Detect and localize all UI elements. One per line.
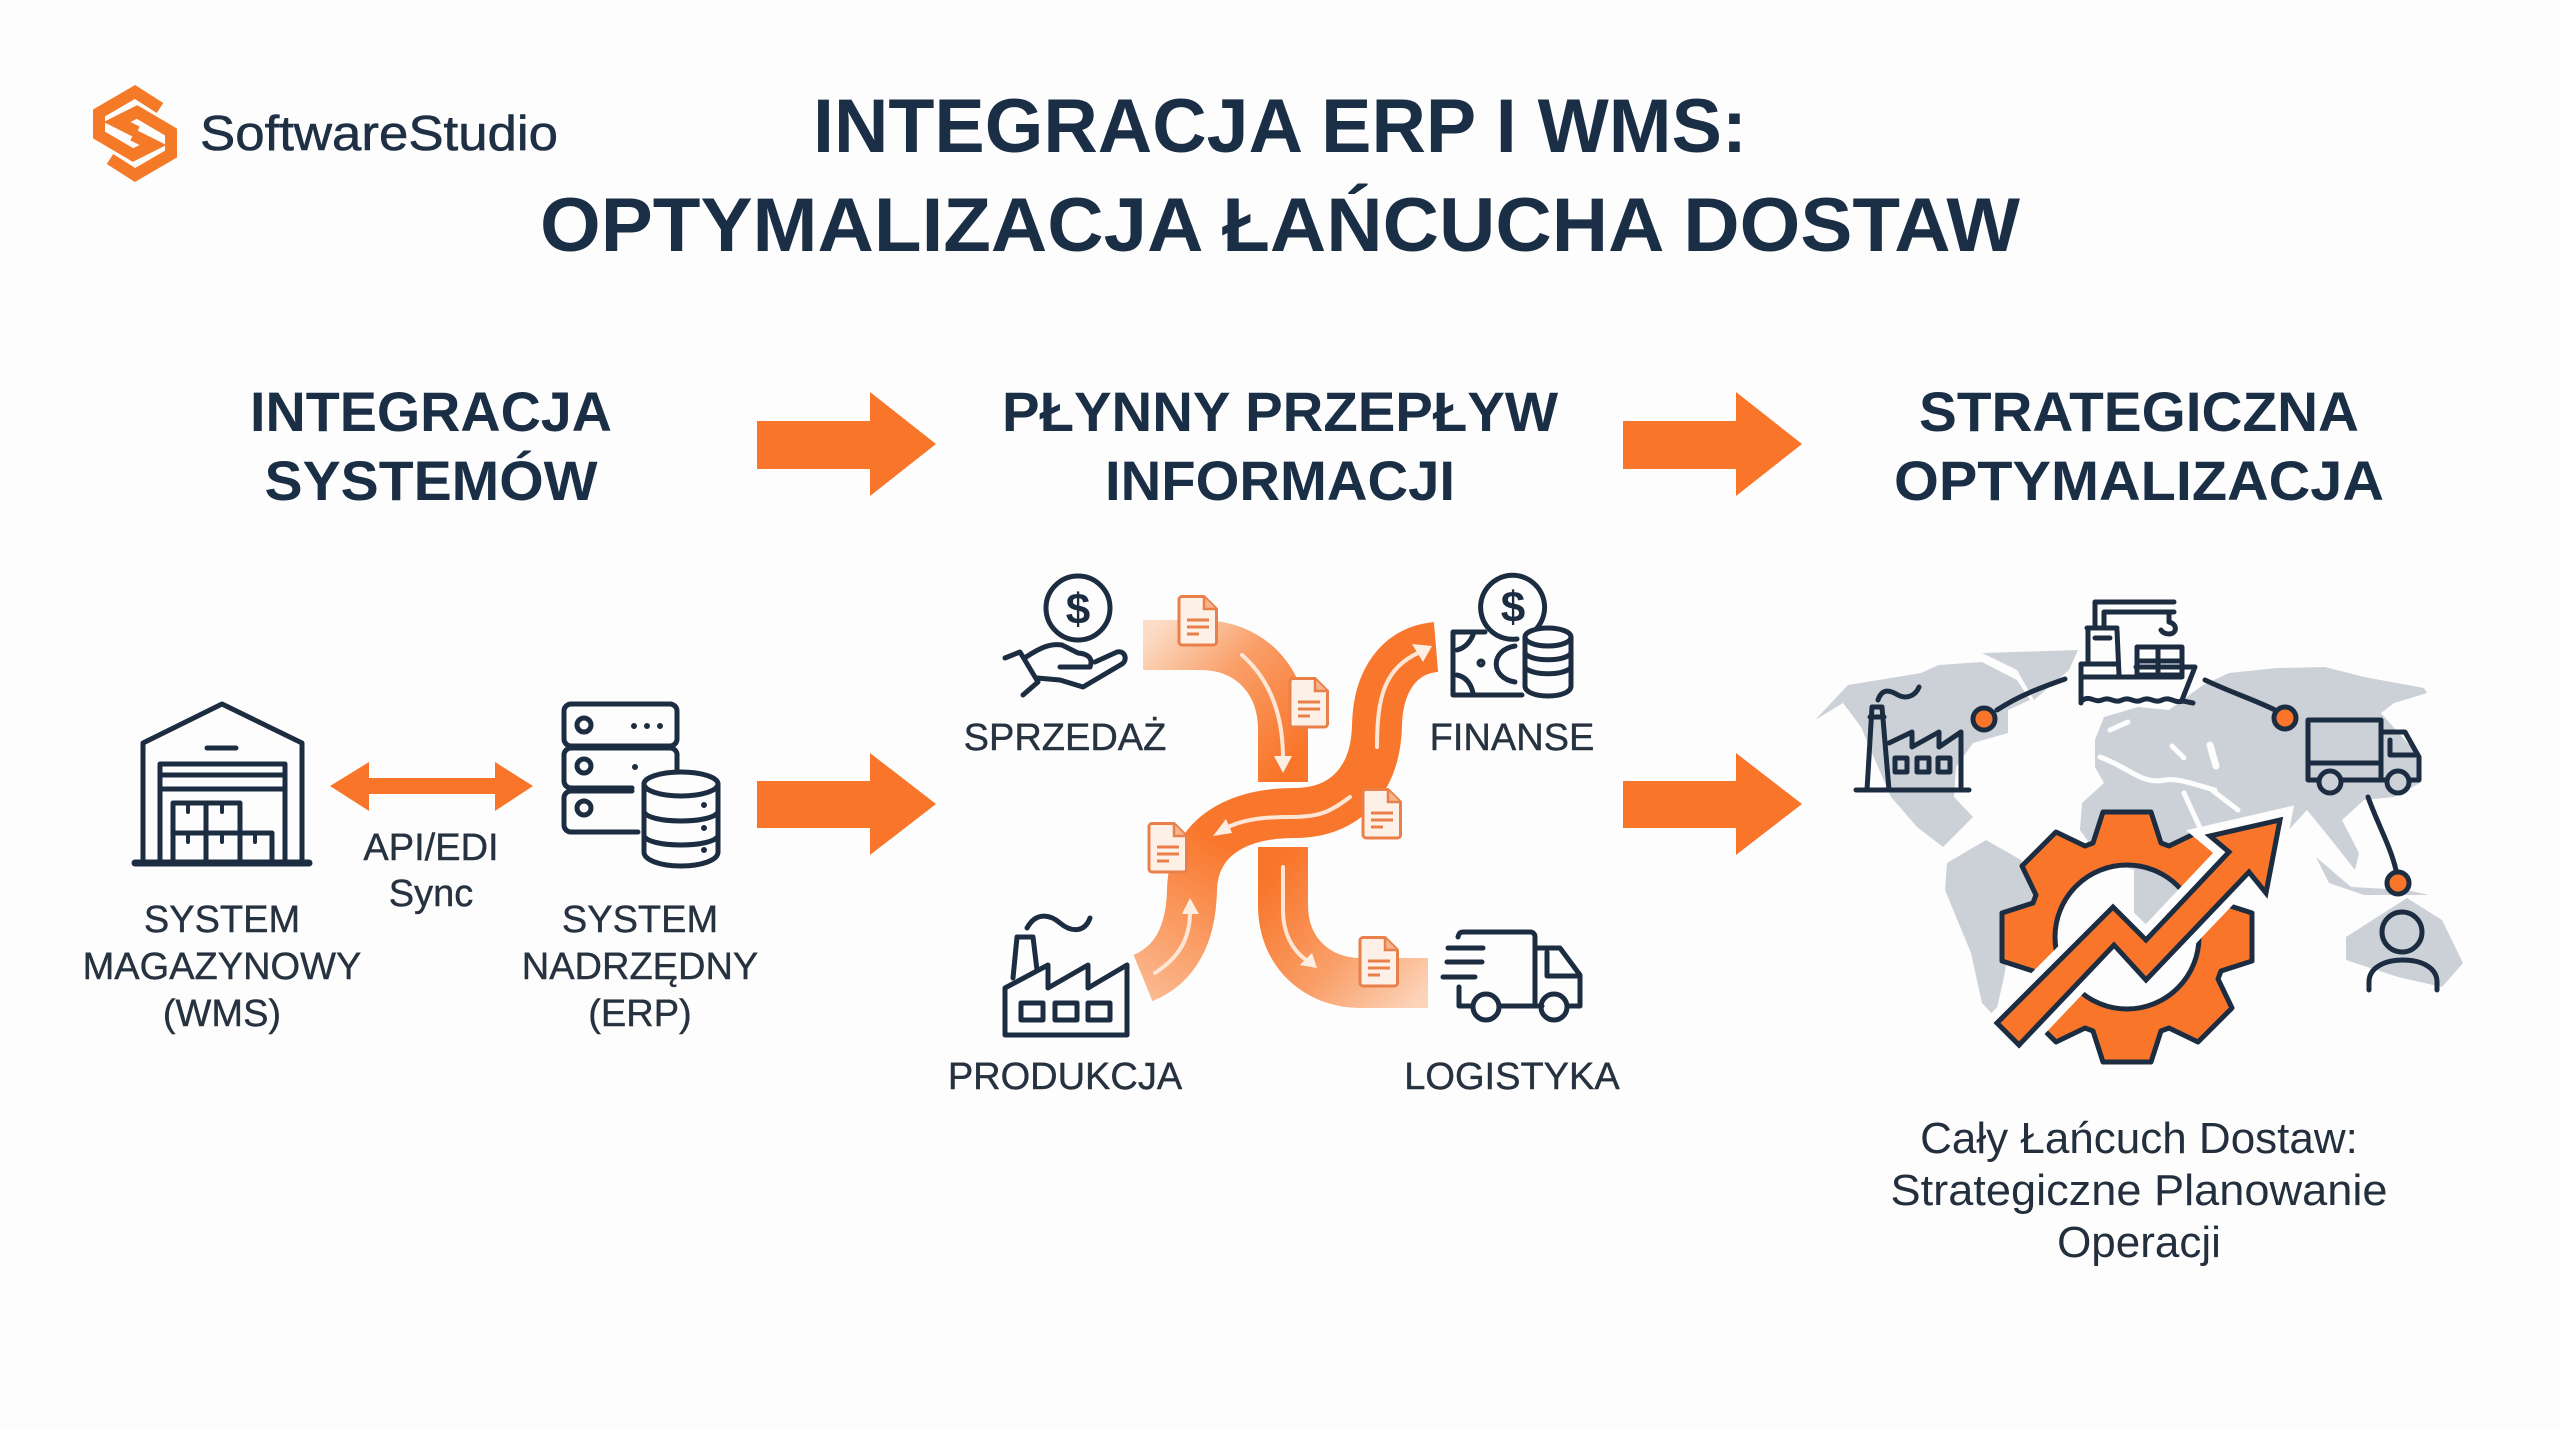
heading: strategiczna optymalizacja: OPTYMALIZACJA [1894,449,2384,512]
label: system magazynowy: MAGAZYNOWY [83,946,361,988]
arrow: up from produkcja [1155,898,1199,973]
logo: SoftwareStudio [99,92,558,175]
flow arrows [1155,644,1432,973]
connector: factory to ship [1973,679,2065,730]
flow diagram: ribbons [1143,645,1436,983]
growth arrow halo [1997,820,2280,1045]
southeast asia islands [2316,857,2429,895]
icon: document 1 [1179,596,1216,645]
label: system nadrzędny: NADRZĘDNY [522,946,758,988]
icon: document 4 [1149,824,1186,872]
connector: truck to customer [2368,797,2409,894]
caption: supply chain [1890,1114,2388,1267]
icon: logistics truck [1443,932,1580,1020]
icon: container ship with crane [2081,602,2195,703]
eurasia and africa [2080,667,2427,943]
caption: supply chain: Operacji [2057,1218,2221,1267]
title: OPTYMALIZACJA ŁAŃCUCHA DOSTAW [540,183,2020,268]
ribbon: sprzedaż [1143,645,1283,782]
label: API/EDI Sync: Sync [389,873,473,915]
icon: small truck [2308,720,2419,793]
heading: strategiczna optymalizacja [1894,380,2384,512]
icon: finance [1453,575,1571,696]
label: system magazynowy: SYSTEM [144,899,300,941]
label: produkcja: PRODUKCJA [948,1056,1183,1098]
heading: integracja systemów: SYSTEMÓW [264,449,598,512]
heading: płynny przepływ informacji: PŁYNNY PRZEPŁYW [1002,380,1558,443]
greenland [1982,650,2078,700]
south america [1945,840,2043,1017]
icon: sales hand with coin: $ [1066,585,1090,634]
arrow: middle right [1623,753,1802,855]
north america [1815,662,2030,847]
double arrow: API/EDI sync [330,762,533,811]
arrow: down from sprzedaż [1242,655,1292,773]
label: API/EDI Sync [363,827,499,915]
title: INTEGRACJA ERP I WMS: [813,84,1747,169]
icon: customer [2369,912,2437,990]
heading: płynny przepływ informacji [1002,380,1558,512]
arrow: top right [1623,392,1802,496]
caption: supply chain: Cały Łańcuch Dostaw: [1920,1114,2358,1163]
arrow: to produkcja [1213,797,1350,836]
arrow: top left [757,392,936,496]
heading: integracja systemów [250,380,612,512]
icon: production factory [1005,916,1127,1035]
brand name: SoftwareStudio [200,107,558,161]
label: system nadrzędny: (ERP) [588,993,692,1035]
label: system magazynowy [83,899,361,1035]
arrow: middle left [757,753,936,855]
label: API/EDI Sync: API/EDI [363,827,499,869]
icon: finance: $ [1501,583,1525,632]
heading: płynny przepływ informacji: INFORMACJI [1105,449,1455,512]
icon: gear with growth arrow [1997,812,2280,1062]
arrow: up to finanse [1377,644,1432,747]
label: finanse: FINANSE [1430,717,1594,759]
label: system nadrzędny: SYSTEM [562,899,718,941]
icon: document 5 [1360,938,1398,986]
heading: strategiczna optymalizacja: STRATEGICZNA [1919,380,2359,443]
icon: hexagon S mark [99,92,171,175]
heading: integracja systemów: INTEGRACJA [250,380,612,443]
icon: small factory [1856,687,1969,790]
growth arrow [1997,820,2280,1045]
label: logistyka: LOGISTYKA [1404,1056,1620,1098]
world map [1815,650,2463,1017]
icon: document 2 [1290,678,1328,727]
connector: ship to truck [2205,680,2296,729]
title [540,84,2020,268]
icon: document 3 [1363,790,1400,838]
arrow: to logistyka [1283,867,1317,968]
label: sprzedaż: SPRZEDAŻ [964,716,1166,759]
icon: ERP server and database [564,704,718,866]
ribbon: logistyka [1283,847,1428,983]
australia [2346,898,2463,987]
label: system magazynowy: (WMS) [163,993,281,1035]
icon: sales hand with coin [1005,576,1125,695]
gear [2002,812,2252,1062]
sea cut-outs [2100,722,2238,830]
caption: supply chain: Strategiczne Planowanie [1890,1166,2388,1215]
icon: warehouse [135,704,309,863]
ribbon: finanse to produkcja [1143,647,1436,978]
label: system nadrzędny [522,899,758,1035]
